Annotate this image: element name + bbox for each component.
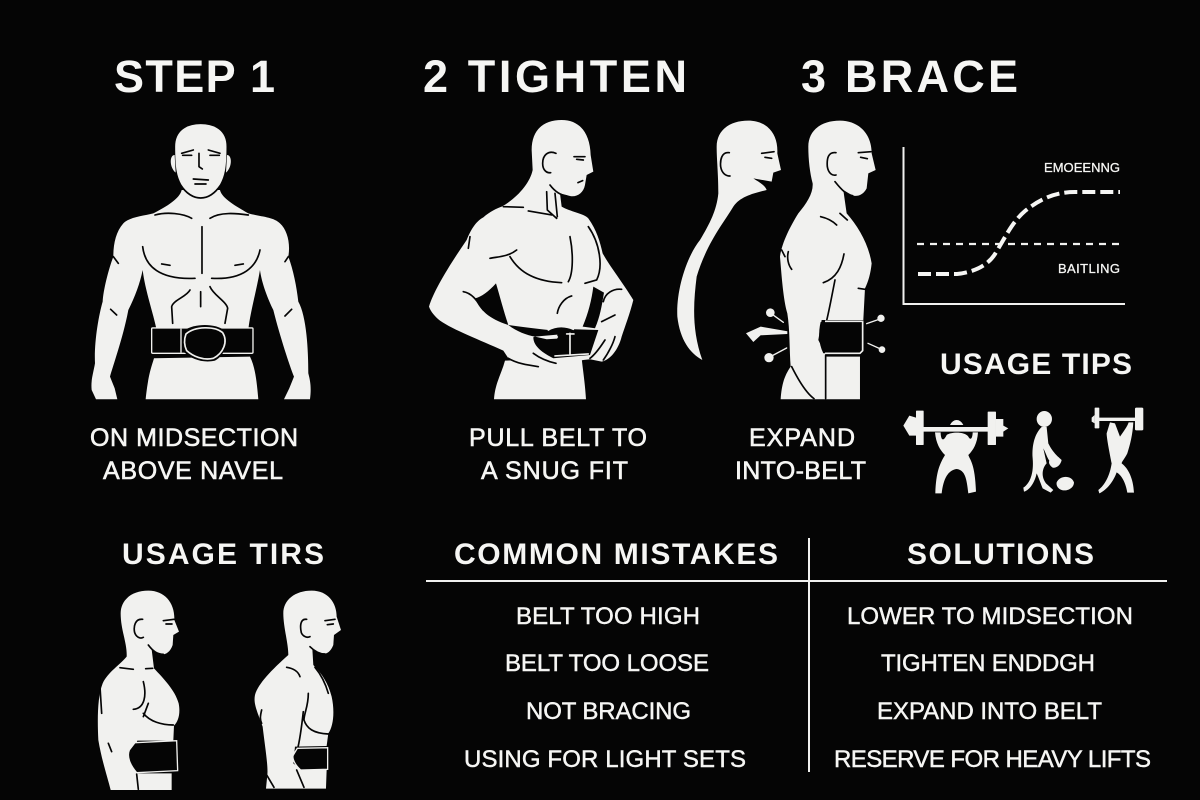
title: step 3 brace: 3 BRACE — [801, 51, 1018, 102]
icon: kettlebell carry — [1023, 411, 1074, 493]
figure: front view man wearing belt — [91, 123, 311, 399]
figure: braced man side view — [780, 121, 876, 399]
icon: squat — [903, 411, 1008, 493]
mistakes column: USING FOR LIGHT SETS — [464, 746, 746, 773]
caption: step 1 — [90, 424, 298, 485]
figure: correct posture side view — [98, 591, 179, 790]
silhouette: face lines — [721, 152, 774, 176]
icon: overhead press — [1092, 408, 1143, 493]
solutions column: LOWER TO MIDSECTION — [847, 603, 1133, 630]
caption: step 2: A SNUG FIT — [481, 457, 628, 485]
chart: bracing line chart: EMOEENNG — [1044, 160, 1120, 175]
chart: bracing line chart: BAITLING — [1058, 261, 1120, 276]
heading: usage tirs left: USAGE TIRS — [122, 538, 324, 571]
caption: step 3 — [735, 424, 866, 485]
mistakes column — [464, 603, 746, 773]
caption: step 2: PULL BELT TO — [469, 424, 647, 452]
silhouette: back contour — [677, 121, 781, 360]
belt: side view — [819, 321, 863, 353]
figures: belt side view comparison — [98, 591, 341, 790]
solutions column: TIGHTEN ENDDGH — [881, 650, 1095, 677]
caption: step 3: INTO-BELT — [735, 457, 866, 485]
caption: step 1: ON MIDSECTION — [90, 424, 298, 452]
figure: breathing silhouette and braced man — [677, 121, 885, 399]
mistakes column: BELT TOO HIGH — [516, 603, 700, 630]
mistakes column: BELT TOO LOOSE — [505, 650, 709, 677]
title: step 2 tighten: 2 TIGHTEN — [423, 51, 687, 102]
belt: front view with round buckle — [152, 325, 253, 361]
caption: step 2 — [469, 424, 647, 485]
figure: man tightening belt — [429, 120, 633, 399]
mistakes column: NOT BRACING — [526, 698, 691, 725]
belt: being pulled snug — [508, 325, 598, 358]
table: common mistakes and solutions — [426, 538, 1167, 773]
belt: left figure — [128, 741, 178, 773]
arrows: expansion outward from belt — [746, 309, 885, 362]
figure: relaxed posture side view — [255, 591, 341, 789]
icons: lifting exercises — [903, 408, 1143, 493]
table heading: common mistakes: COMMON MISTAKES — [454, 538, 778, 571]
title: step 1: STEP 1 — [114, 51, 275, 102]
table heading: solutions: SOLUTIONS — [907, 538, 1094, 571]
solutions column: RESERVE FOR HEAVY LIFTS — [834, 746, 1151, 773]
caption: step 3: EXPAND — [749, 424, 855, 452]
chart: bracing line chart — [904, 147, 1125, 304]
solutions column — [834, 603, 1151, 773]
caption: step 1: ABOVE NAVEL — [103, 457, 283, 485]
belt: right figure — [293, 748, 328, 770]
solutions column: EXPAND INTO BELT — [877, 698, 1102, 725]
heading: usage tips right: USAGE TIPS — [940, 348, 1132, 381]
